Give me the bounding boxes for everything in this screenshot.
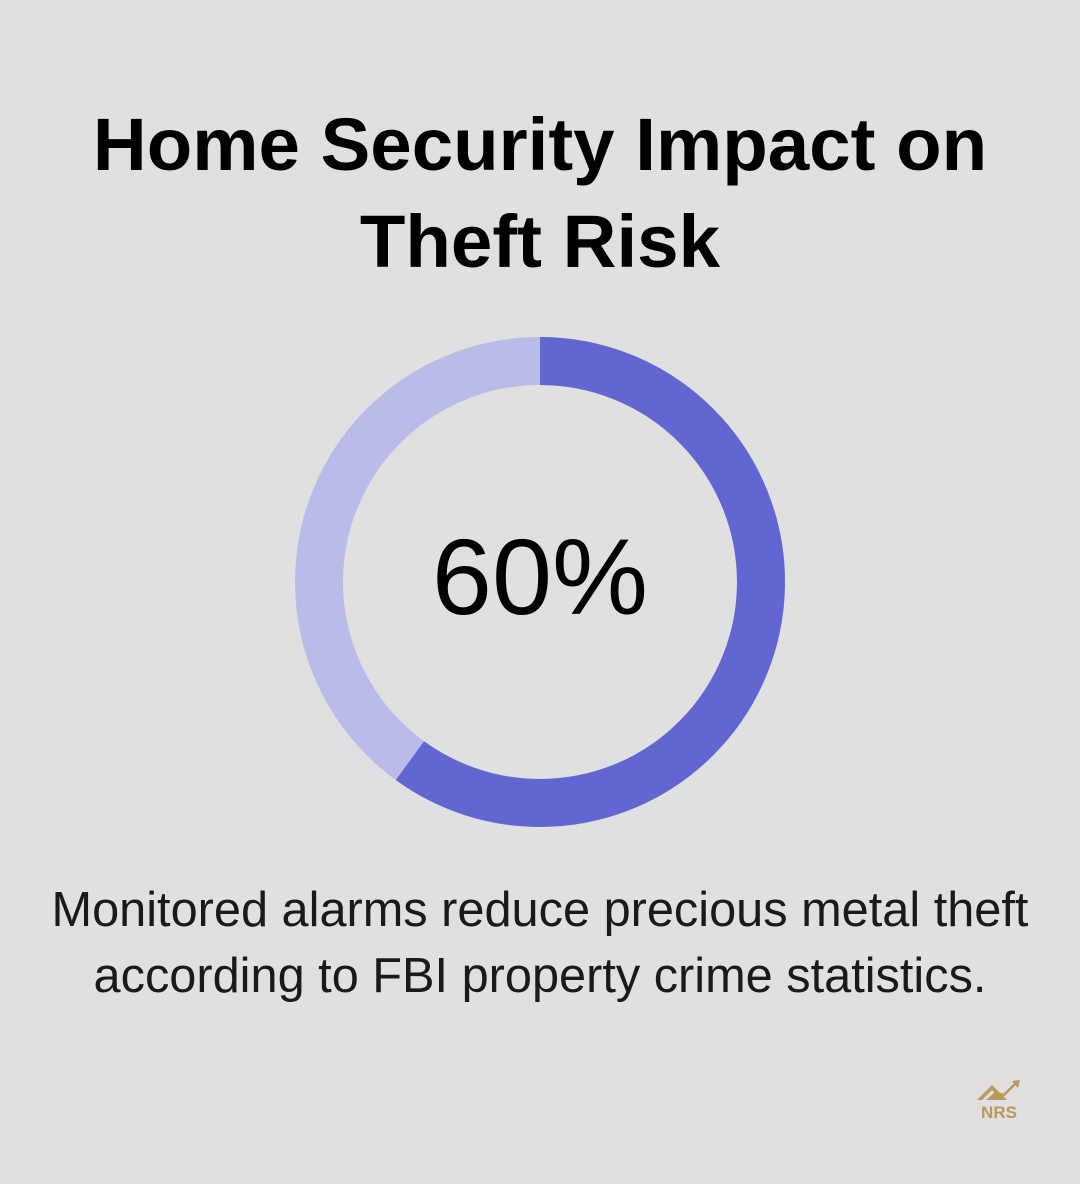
logo: NRS: NRS <box>981 1103 1017 1122</box>
description text: Monitored alarms reduce precious metal theft <box>52 883 1028 937</box>
donut chart: 60% <box>432 516 648 637</box>
title <box>93 103 987 283</box>
title: Home Security Impact on <box>93 103 987 186</box>
title: Theft Risk <box>360 200 720 283</box>
logo: NRS <box>977 1080 1020 1122</box>
description text: according to FBI property crime statistics. <box>94 949 986 1003</box>
description text <box>52 883 1028 1003</box>
